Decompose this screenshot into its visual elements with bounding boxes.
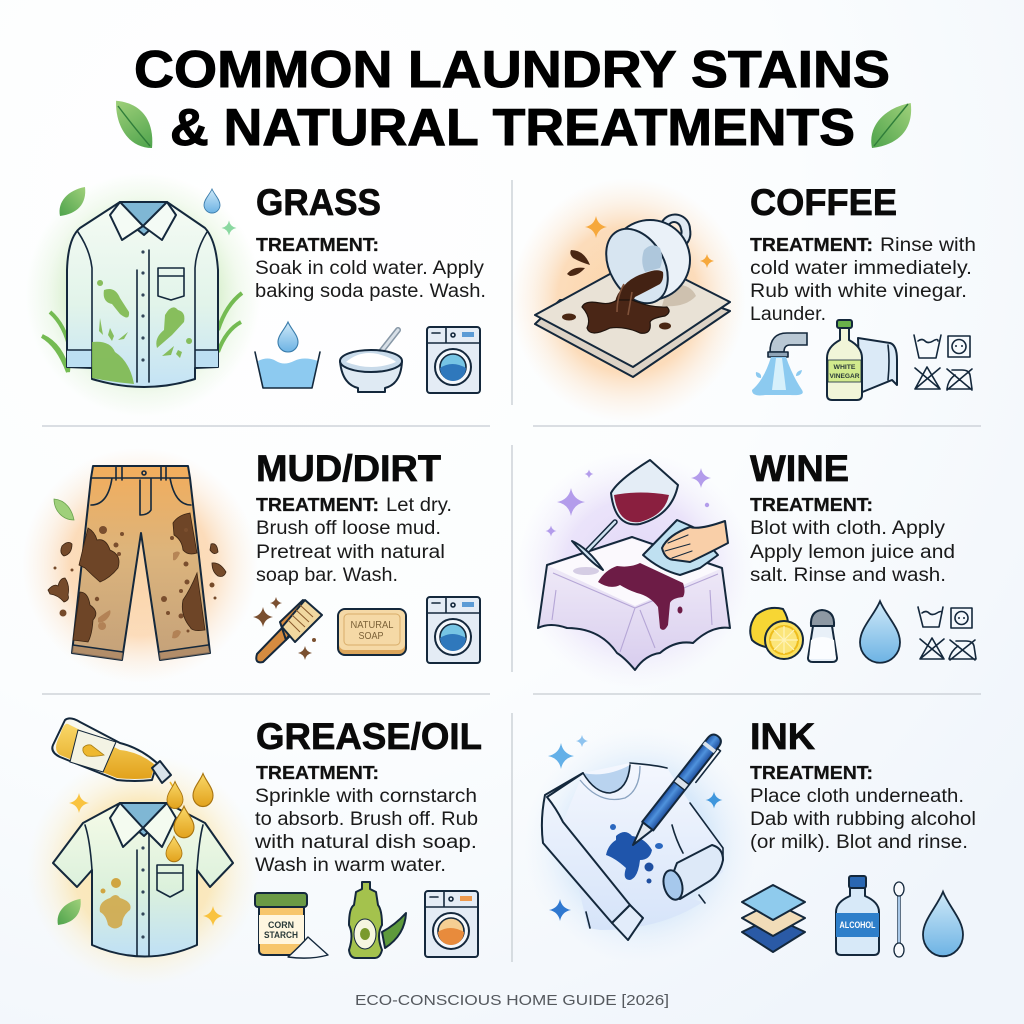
text: ink treatment: (or milk). Blot and rinse. [750,832,968,853]
icon: baking soda bowl [340,330,402,392]
panel: grass [25,173,486,417]
text: grass treatment: TREATMENT: [256,234,379,255]
icon: care symbols [914,335,972,390]
text: grease treatment: Wash in warm water. [255,855,446,876]
icon: sparkle [222,220,236,236]
icon: vinegar bottle and towel [827,320,897,400]
icon: alcohol bottle: ALCOHOL [840,920,876,931]
text: coffee treatment: TREATMENT: [750,234,873,255]
icon: alcohol bottle [836,876,879,955]
illustration: wine spill on tablecloth [517,452,753,688]
panel: coffee [510,178,976,422]
icon: water basin [255,322,320,388]
text: wine treatment: Apply lemon juice and [750,542,955,563]
text: grease treatment: to absorb. Brush off. Rub [255,809,478,830]
heading: coffee: COFFEE [750,182,897,223]
text: coffee treatment: Rinse with [880,235,976,256]
text: wine treatment [750,494,955,586]
text: ink treatment: Place cloth underneath. [750,786,964,807]
icon: water drop [923,892,963,956]
icon: salt shaker [808,610,837,662]
text: ink treatment [750,762,976,853]
icon: vinegar bottle and towel: VINEGAR [830,373,860,380]
text: coffee treatment: Launder. [750,304,826,325]
icon: water drop [860,601,900,663]
illustration: muddy trousers [22,447,258,683]
icon: lemon [750,608,803,659]
icon: care symbols [918,607,976,660]
icon: faucet [752,333,807,395]
icon: leaf [54,499,74,520]
text: mud treatment: Let dry. [386,495,452,516]
illustration: grass-stained shirt [25,173,261,417]
icon: dish soap [349,882,406,958]
heading: grass: GRASS [256,182,381,223]
text: grease treatment: with natural dish soap. [254,832,477,853]
text: wine treatment: salt. Rinse and wash. [750,565,946,586]
text: grease treatment [254,762,478,876]
icon: title leaf right [871,103,911,148]
title: & NATURAL TREATMENTS [170,99,855,157]
text: coffee treatment: cold water immediately. [750,258,972,279]
icon: cotton swab [894,882,904,957]
icon: natural soap: SOAP [358,630,384,642]
text: mud treatment: soap bar. Wash. [256,565,398,586]
icon: natural soap [338,609,406,655]
text: mud treatment: Brush off loose mud. [256,518,441,539]
illustration: oil bottle over stained shirt [27,718,259,986]
text: mud treatment: TREATMENT: [256,494,379,515]
icon: washing machine [427,597,480,663]
text: wine treatment: TREATMENT: [750,494,873,515]
title [134,41,890,157]
title: COMMON LAUNDRY STAINS [134,41,890,99]
illustration: spilled coffee on fabric [510,178,746,422]
icon: vinegar bottle and towel: WHITE [834,364,856,371]
icon: cornstarch jar [255,893,328,958]
heading: mud/dirt: MUD/DIRT [256,448,441,489]
icon: title leaf left [108,100,160,149]
icon: leaf [60,187,85,216]
icon: cloth layers [742,885,805,952]
text: coffee treatment: Rub with white vinegar. [750,281,967,302]
text: grease treatment: Sprinkle with cornstarch [255,786,477,807]
icon: water drop [204,189,220,213]
heading: wine: WINE [750,448,849,489]
icon: brush [253,597,322,662]
footer: ECO-CONSCIOUS HOME GUIDE [2026] [355,992,669,1009]
icon: cornstarch jar: CORN [268,920,294,931]
text: grass treatment: Soak in cold water. Apply [255,258,485,279]
text: ink treatment: TREATMENT: [750,762,873,783]
icon: cornstarch jar: STARCH [264,930,298,941]
text: ink treatment: Dab with rubbing alcohol [750,809,976,830]
text: grease treatment: TREATMENT: [256,762,379,783]
text: coffee treatment [750,234,976,325]
panel: mud and dirt [22,447,480,683]
heading: ink: INK [750,716,815,757]
icon: natural soap: NATURAL [350,619,394,631]
panel: wine [517,448,976,688]
text: grass treatment: baking soda paste. Wash. [255,281,486,302]
illustration: ink-stained sweatshirt and pen [524,727,756,963]
icon: washing machine [425,891,478,957]
panel: ink [524,716,976,963]
heading: grease/oil: GREASE/OIL [256,716,482,757]
text: mud treatment [256,494,452,586]
text: grass treatment [255,234,486,302]
text: mud treatment: Pretreat with natural [256,542,445,563]
icon: washing machine [427,327,480,393]
panel: grease and oil [27,716,482,986]
text: wine treatment: Blot with cloth. Apply [750,518,946,539]
